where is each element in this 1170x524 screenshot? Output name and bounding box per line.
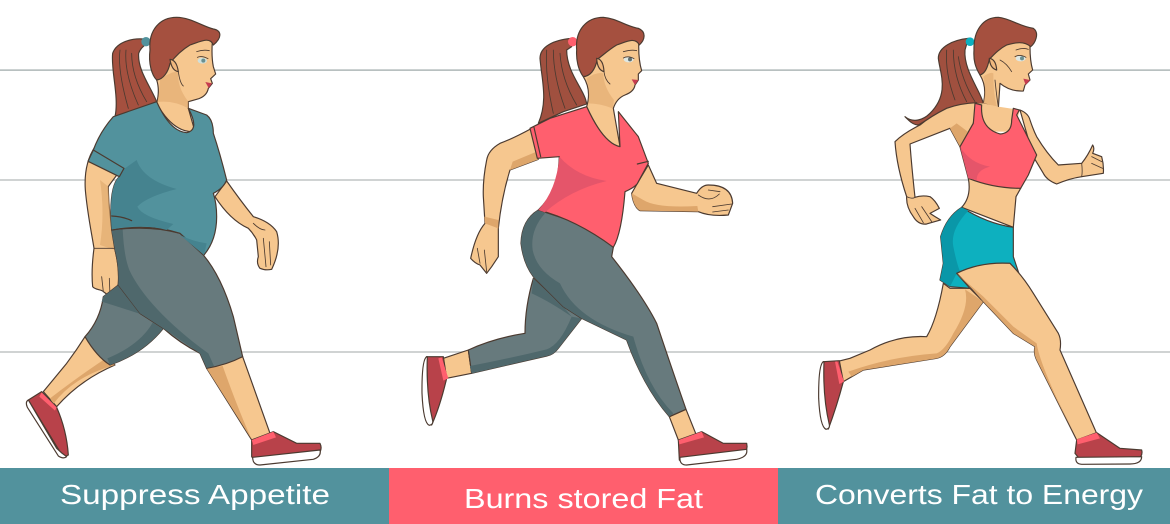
shorts [940,207,1020,288]
right arm [215,181,278,270]
chest [977,103,1020,132]
head [157,32,216,132]
hair [974,17,1037,75]
t-shirt [88,102,227,255]
front capri leg [112,228,243,368]
far arm [895,103,977,224]
rear leg [837,283,983,382]
rear shoe [28,392,68,457]
rear shoe [823,361,843,429]
far arm [471,128,538,273]
front legging [521,210,686,417]
ponytail [538,38,587,123]
rear legging [468,278,582,373]
waist [962,178,1021,227]
rear calf [43,337,115,407]
hair tie [141,37,151,46]
rear calf [443,350,472,378]
ponytail [112,39,157,117]
figure: overweight woman walking [26,17,321,465]
front leg [957,263,1097,440]
front shoe [252,432,321,463]
near arm [1020,110,1103,184]
head and neck [980,32,1033,108]
banner: burns stored fat [389,468,778,524]
figure: mid-weight woman jogging [422,17,747,465]
sports bra [960,103,1037,188]
front shoe [678,432,747,463]
near arm [632,165,733,215]
front shoe [1075,433,1142,459]
hair tie [568,37,577,46]
shirt [530,107,648,247]
left arm [85,147,123,296]
banner: suppress appetite [0,468,389,524]
front calf [207,357,270,440]
rear capri leg [85,285,163,365]
figure: slim woman running [819,17,1142,464]
ponytail [905,38,983,125]
head and neck [583,32,642,147]
hair [150,17,220,80]
front calf [669,409,698,440]
hair [577,17,644,77]
hair tie [966,37,974,46]
banner: converts fat to energy: Converts Fat to Energy [815,479,1143,510]
banner: suppress appetite: Suppress Appetite [60,479,330,510]
banner: converts fat to energy [778,468,1170,524]
rear shoe [427,357,447,425]
banner: burns stored fat: Burns stored Fat [464,483,703,514]
